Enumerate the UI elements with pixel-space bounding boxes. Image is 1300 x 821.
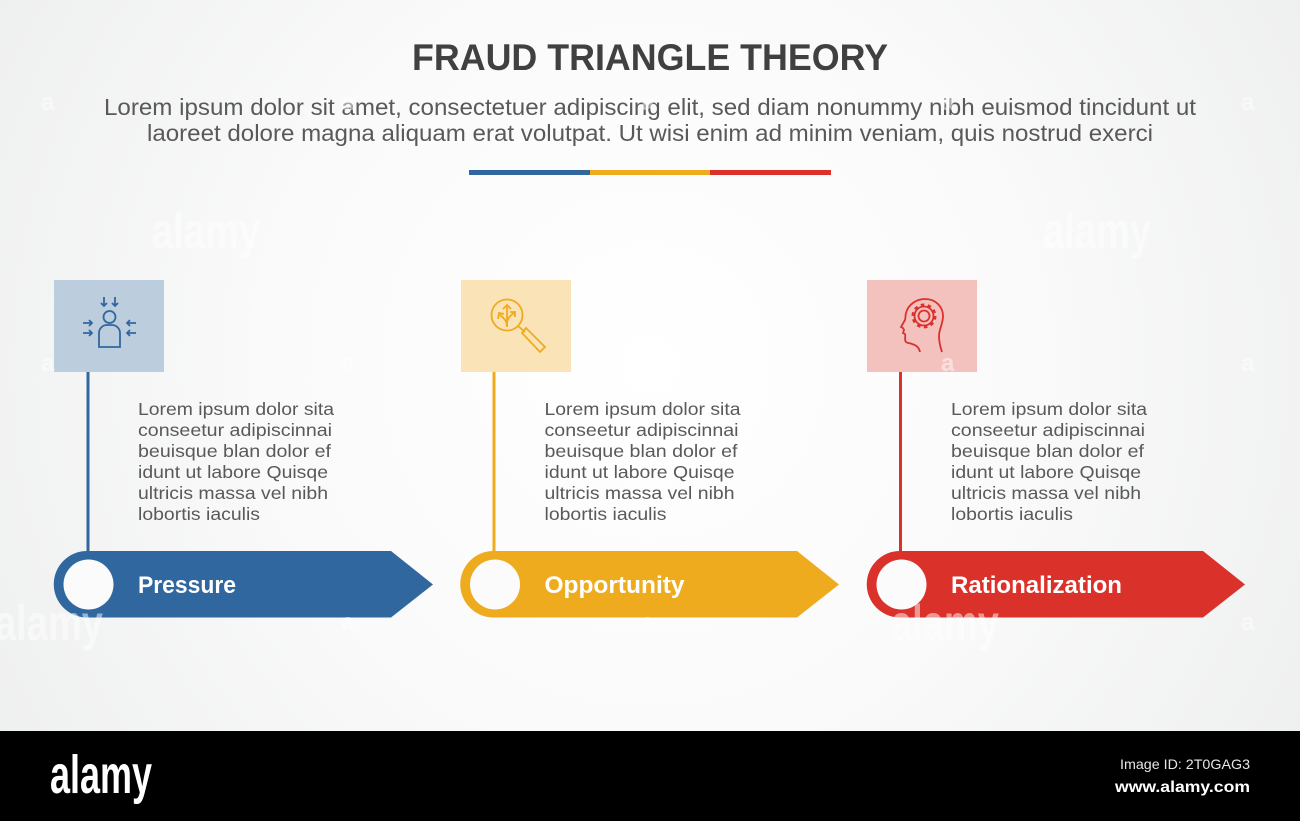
description: idunt ut labore Quisqe <box>951 462 1141 482</box>
description: conseetur adipiscinnai <box>138 420 332 440</box>
icon box <box>54 280 164 372</box>
watermarks: a <box>41 89 55 116</box>
description <box>951 399 1147 524</box>
icon box <box>461 280 571 372</box>
description: lobortis iaculis <box>138 504 260 524</box>
website: www.alamy.com <box>1114 779 1250 796</box>
watermarks: a <box>341 609 355 636</box>
tricolor divider <box>469 170 831 175</box>
connector line <box>492 370 496 555</box>
icon: head with gear <box>901 299 943 352</box>
arrow banner <box>54 551 433 618</box>
circle <box>876 560 926 610</box>
watermarks: a <box>41 350 55 377</box>
label: Pressure <box>138 572 236 599</box>
watermarks: alamy <box>1043 203 1151 259</box>
footer bar <box>0 731 1300 821</box>
description: idunt ut labore Quisqe <box>544 462 734 482</box>
description: idunt ut labore Quisqe <box>138 462 328 482</box>
description: beuisque blan dolor ef <box>138 441 331 461</box>
image id: Image ID: 2T0GAG3 <box>1120 756 1250 772</box>
description: ultricis massa vel nibh <box>951 483 1141 503</box>
watermarks: a <box>1241 609 1255 636</box>
description: ultricis massa vel nibh <box>138 483 328 503</box>
subtitle text: laoreet dolore magna aliquam erat volutpat. Ut wisi enim ad minim veniam, quis nostrud exerci <box>147 120 1153 146</box>
subtitle text <box>104 94 1197 146</box>
circle <box>64 560 114 610</box>
watermarks <box>0 89 1255 651</box>
footer logo: alamy <box>50 745 152 805</box>
watermarks: a <box>341 350 355 377</box>
icon: person under pressure <box>83 297 136 347</box>
description <box>138 399 334 524</box>
column: opportunity <box>460 280 839 618</box>
description: beuisque blan dolor ef <box>544 441 738 461</box>
subtitle text: Lorem ipsum dolor sit amet, consectetuer adipiscing elit, sed diam nonummy nibh euismod tincidunt ut <box>104 94 1197 120</box>
circle <box>470 560 520 610</box>
description <box>544 399 741 524</box>
watermarks: a <box>641 89 655 116</box>
icon: magnifier with arrows <box>492 300 545 352</box>
label: Rationalization <box>951 572 1122 599</box>
description: ultricis massa vel nibh <box>544 483 734 503</box>
watermarks: a <box>941 350 955 377</box>
description: Lorem ipsum dolor sita <box>138 399 334 419</box>
watermarks: a <box>941 89 955 116</box>
description: Lorem ipsum dolor sita <box>544 399 741 419</box>
label: Opportunity <box>544 572 685 599</box>
description: conseetur adipiscinnai <box>544 420 738 440</box>
arrow banner <box>460 551 839 618</box>
column: pressure <box>54 280 433 618</box>
connector line <box>86 370 90 555</box>
description: lobortis iaculis <box>951 504 1073 524</box>
description: lobortis iaculis <box>544 504 667 524</box>
watermarks: alamy <box>152 203 260 259</box>
description: Lorem ipsum dolor sita <box>951 399 1147 419</box>
connector line <box>899 370 902 555</box>
column: rationalization <box>867 280 1245 618</box>
description: beuisque blan dolor ef <box>951 441 1144 461</box>
watermarks: a <box>1241 350 1255 377</box>
title: FRAUD TRIANGLE THEORY <box>412 37 888 78</box>
watermarks: a <box>641 609 655 636</box>
description: conseetur adipiscinnai <box>951 420 1145 440</box>
watermarks: a <box>1241 89 1255 116</box>
watermarks: a <box>341 89 355 116</box>
icon box <box>867 280 977 372</box>
arrow banner <box>867 551 1245 618</box>
watermarks: alamy <box>891 595 999 651</box>
